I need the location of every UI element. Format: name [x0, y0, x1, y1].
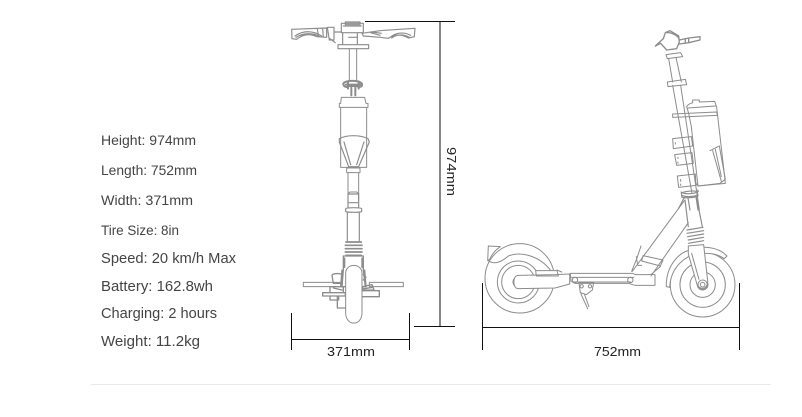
icon: rear hook [632, 246, 642, 271]
front view scooter upper [292, 22, 415, 201]
icon: deck bolts [572, 277, 633, 288]
spec: speed: Speed: 20 km/h Max [101, 251, 237, 267]
icon: hub left [323, 274, 345, 308]
front view scooter lower [303, 193, 403, 323]
icon: bracket lower [677, 174, 696, 187]
icon: front fender [666, 247, 727, 287]
spec: weight: Weight: 11.2kg [101, 334, 200, 350]
icon: front tube and spring [685, 198, 704, 243]
icon: right grip [362, 28, 415, 38]
dimension: height 974mm [365, 21, 459, 326]
dimension label: 371mm: 371mm [327, 344, 375, 359]
dimension: width 371mm [291, 313, 410, 359]
icon: tube collar [346, 193, 362, 241]
icon: fork [341, 256, 366, 287]
icon: bracket middle [675, 153, 693, 165]
icon: head and brake lever [327, 22, 363, 44]
icon: left deck [303, 282, 342, 287]
icon: collar [681, 190, 698, 197]
icon: spring [345, 242, 362, 255]
icon: right deck [369, 282, 403, 287]
icon: stem tubes [669, 57, 699, 209]
icon: battery strap [673, 112, 717, 117]
dimension label: 974mm: 974mm [444, 147, 459, 196]
icon: upper collar [667, 79, 687, 87]
spec: length: Length: 752mm [101, 163, 197, 178]
icon: deck [570, 273, 655, 285]
icon: kickstand [579, 283, 594, 309]
spec: battery: Battery: 162.8wh [101, 279, 213, 295]
icon: folding joint [343, 81, 362, 95]
icon: left grip [292, 28, 327, 39]
icon: rear arm [514, 270, 570, 289]
icon: lower tube [347, 168, 360, 201]
icon: rear fender [488, 246, 550, 270]
icon: battery [339, 97, 368, 167]
dimension label: 752mm: 752mm [594, 344, 641, 359]
spec: width: Width: 371mm [101, 193, 193, 208]
dimension: length 752mm [482, 283, 740, 359]
icon: handlebar and brake lever [655, 31, 700, 50]
spec: charging: Charging: 2 hours [101, 306, 217, 322]
icon: rear wheel [485, 244, 554, 313]
icon: clamp [338, 45, 369, 49]
spec: height: Height: 974mm [101, 133, 196, 148]
icon: bracket upper [673, 137, 693, 149]
side view scooter upper [655, 31, 725, 210]
icon: head clamp [666, 53, 683, 59]
icon: front wheel [346, 265, 362, 323]
icon: bottle cage [696, 146, 725, 186]
spec list [101, 133, 237, 350]
side view scooter lower [485, 190, 735, 317]
icon: folding struts [632, 201, 688, 276]
icon: lower collar [679, 191, 698, 210]
icon: stem [349, 49, 357, 81]
spec: tire size: Tire Size: 8in [101, 222, 179, 238]
icon: bottle cage [339, 136, 369, 167]
icon: hub right [363, 275, 379, 297]
icon: front wheel [670, 252, 735, 317]
icon: front fork [688, 245, 708, 288]
icon: battery [687, 100, 725, 186]
